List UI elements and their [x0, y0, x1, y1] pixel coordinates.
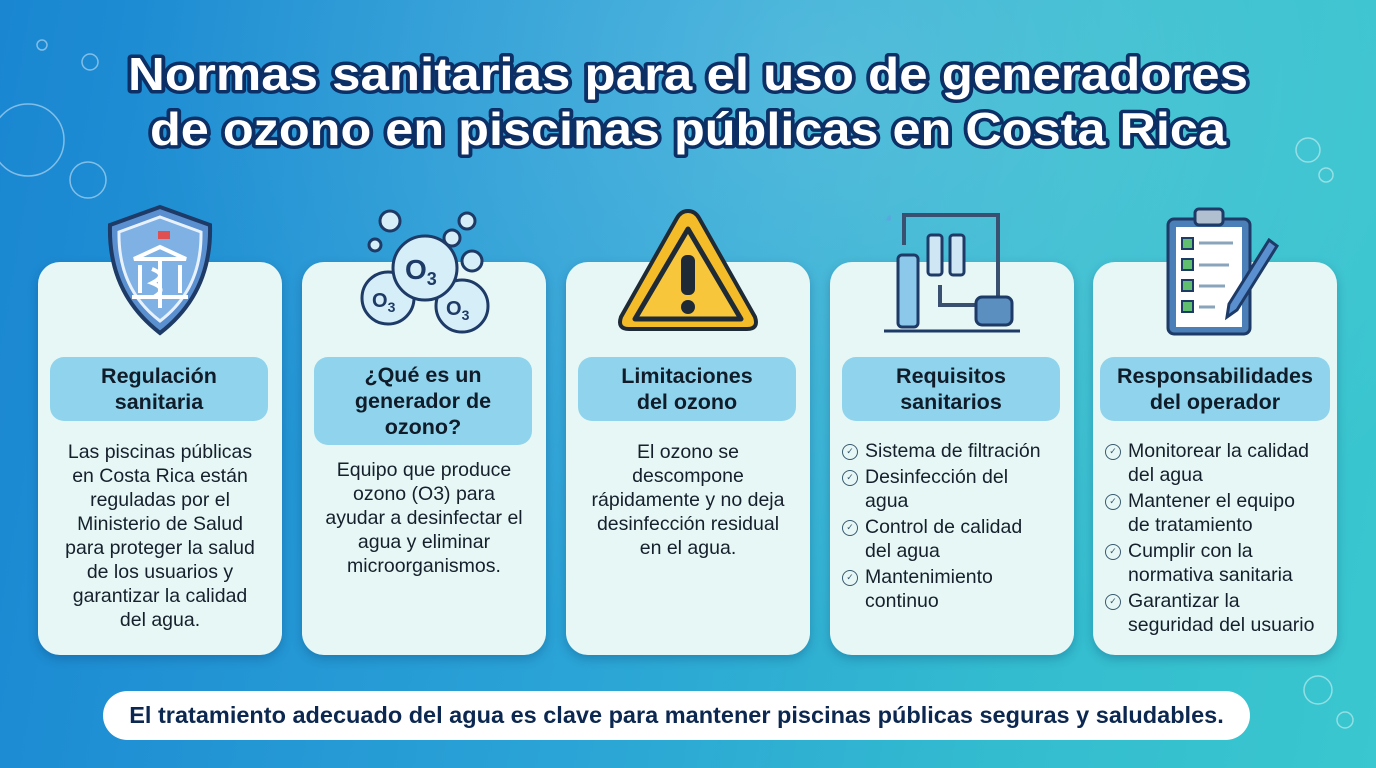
- title: Normas sanitarias para el uso de generadores: [128, 48, 1248, 100]
- panel: limitaciones: desinfección residual: [597, 513, 779, 535]
- icon: ozone bubbles: O: [446, 298, 462, 320]
- panel: requisitos: [830, 262, 1074, 655]
- panel: qué es un generador: [302, 262, 546, 655]
- icon: ozone bubbles: O: [405, 254, 427, 285]
- panel: qué es un generador: microorganismos.: [347, 555, 501, 577]
- panel: limitaciones: [566, 262, 810, 655]
- panel: requisitos: Sistema de filtración: [865, 440, 1041, 462]
- panel: responsabilidades: Mantener el equipo: [1128, 490, 1295, 512]
- panel: requisitos: Desinfección del: [865, 466, 1008, 488]
- icon: ozone bubbles: 3: [427, 269, 437, 289]
- icon: ozone bubbles: [360, 210, 490, 334]
- panel: regulación sanitaria: garantizar la calidad: [73, 585, 247, 607]
- title: [128, 48, 1250, 158]
- panel: regulación sanitaria: Ministerio de Salud: [77, 513, 243, 535]
- panel: requisitos: Requisitos: [896, 364, 1006, 388]
- panel: regulación sanitaria: Las piscinas públicas: [68, 441, 252, 463]
- icon: warning: [618, 209, 758, 331]
- panel: regulación sanitaria: sanitaria: [115, 390, 203, 414]
- footer callout: El tratamiento adecuado del agua es clave para mantener piscinas públicas seguras y saludables.: [129, 702, 1224, 728]
- panel: regulación sanitaria: de los usuarios y: [87, 561, 233, 583]
- icon: filtration system: [884, 213, 1020, 332]
- panel: responsabilidades: Responsabilidades: [1117, 364, 1313, 388]
- panel: qué es un generador: ozono (O3) para: [353, 483, 495, 505]
- icon: ozone bubbles: 3: [462, 307, 470, 323]
- panel: limitaciones: en el agua.: [640, 537, 736, 559]
- panel: responsabilidades: seguridad del usuario: [1128, 614, 1314, 636]
- panel: requisitos: Control de calidad: [865, 516, 1022, 538]
- panel: responsabilidades: del operador: [1150, 390, 1280, 414]
- panel: responsabilidades: [1093, 262, 1337, 655]
- icon: clipboard: [1166, 208, 1279, 336]
- icon: shield: [108, 204, 212, 336]
- panel: responsabilidades: de tratamiento: [1128, 514, 1253, 536]
- panel: responsabilidades: Garantizar la: [1128, 590, 1240, 612]
- panel: responsabilidades: Cumplir con la: [1128, 540, 1253, 562]
- panel: regulación sanitaria: del agua.: [120, 609, 200, 631]
- panel: responsabilidades: Monitorear la calidad: [1128, 440, 1309, 462]
- panel: regulación sanitaria: [38, 262, 282, 655]
- panel: qué es un generador: ¿Qué es un: [364, 363, 482, 387]
- panel: qué es un generador: generador de: [355, 389, 491, 413]
- panel: requisitos: Mantenimiento: [865, 566, 993, 588]
- footer callout: [103, 691, 1250, 740]
- panel: requisitos: sanitarios: [900, 390, 1002, 414]
- panel: limitaciones: descompone: [632, 465, 744, 487]
- panel: limitaciones: del ozono: [637, 390, 737, 414]
- icon: ozone bubbles: 3: [388, 299, 396, 315]
- panel: requisitos: del agua: [865, 540, 940, 562]
- panel: qué es un generador: Equipo que produce: [337, 459, 511, 481]
- panel: regulación sanitaria: en Costa Rica están: [72, 465, 248, 487]
- panel: responsabilidades: del agua: [1128, 464, 1203, 486]
- title: de ozono en piscinas públicas en Costa Rica: [150, 103, 1226, 155]
- panel: limitaciones: Limitaciones: [621, 364, 753, 388]
- panel: regulación sanitaria: Regulación: [101, 364, 217, 388]
- panel: limitaciones: El ozono se: [637, 441, 739, 463]
- panel: qué es un generador: ozono?: [385, 415, 461, 439]
- panel: limitaciones: rápidamente y no deja: [592, 489, 784, 511]
- panel: qué es un generador: agua y eliminar: [358, 531, 490, 553]
- panel: requisitos: continuo: [865, 590, 939, 612]
- panel: regulación sanitaria: para proteger la salud: [65, 537, 255, 559]
- panel: requisitos: agua: [865, 490, 908, 512]
- panel: regulación sanitaria: reguladas por el: [90, 489, 230, 511]
- panel: responsabilidades: normativa sanitaria: [1128, 564, 1293, 586]
- icon: ozone bubbles: O: [372, 290, 388, 312]
- panel: qué es un generador: ayudar a desinfectar el: [325, 507, 523, 529]
